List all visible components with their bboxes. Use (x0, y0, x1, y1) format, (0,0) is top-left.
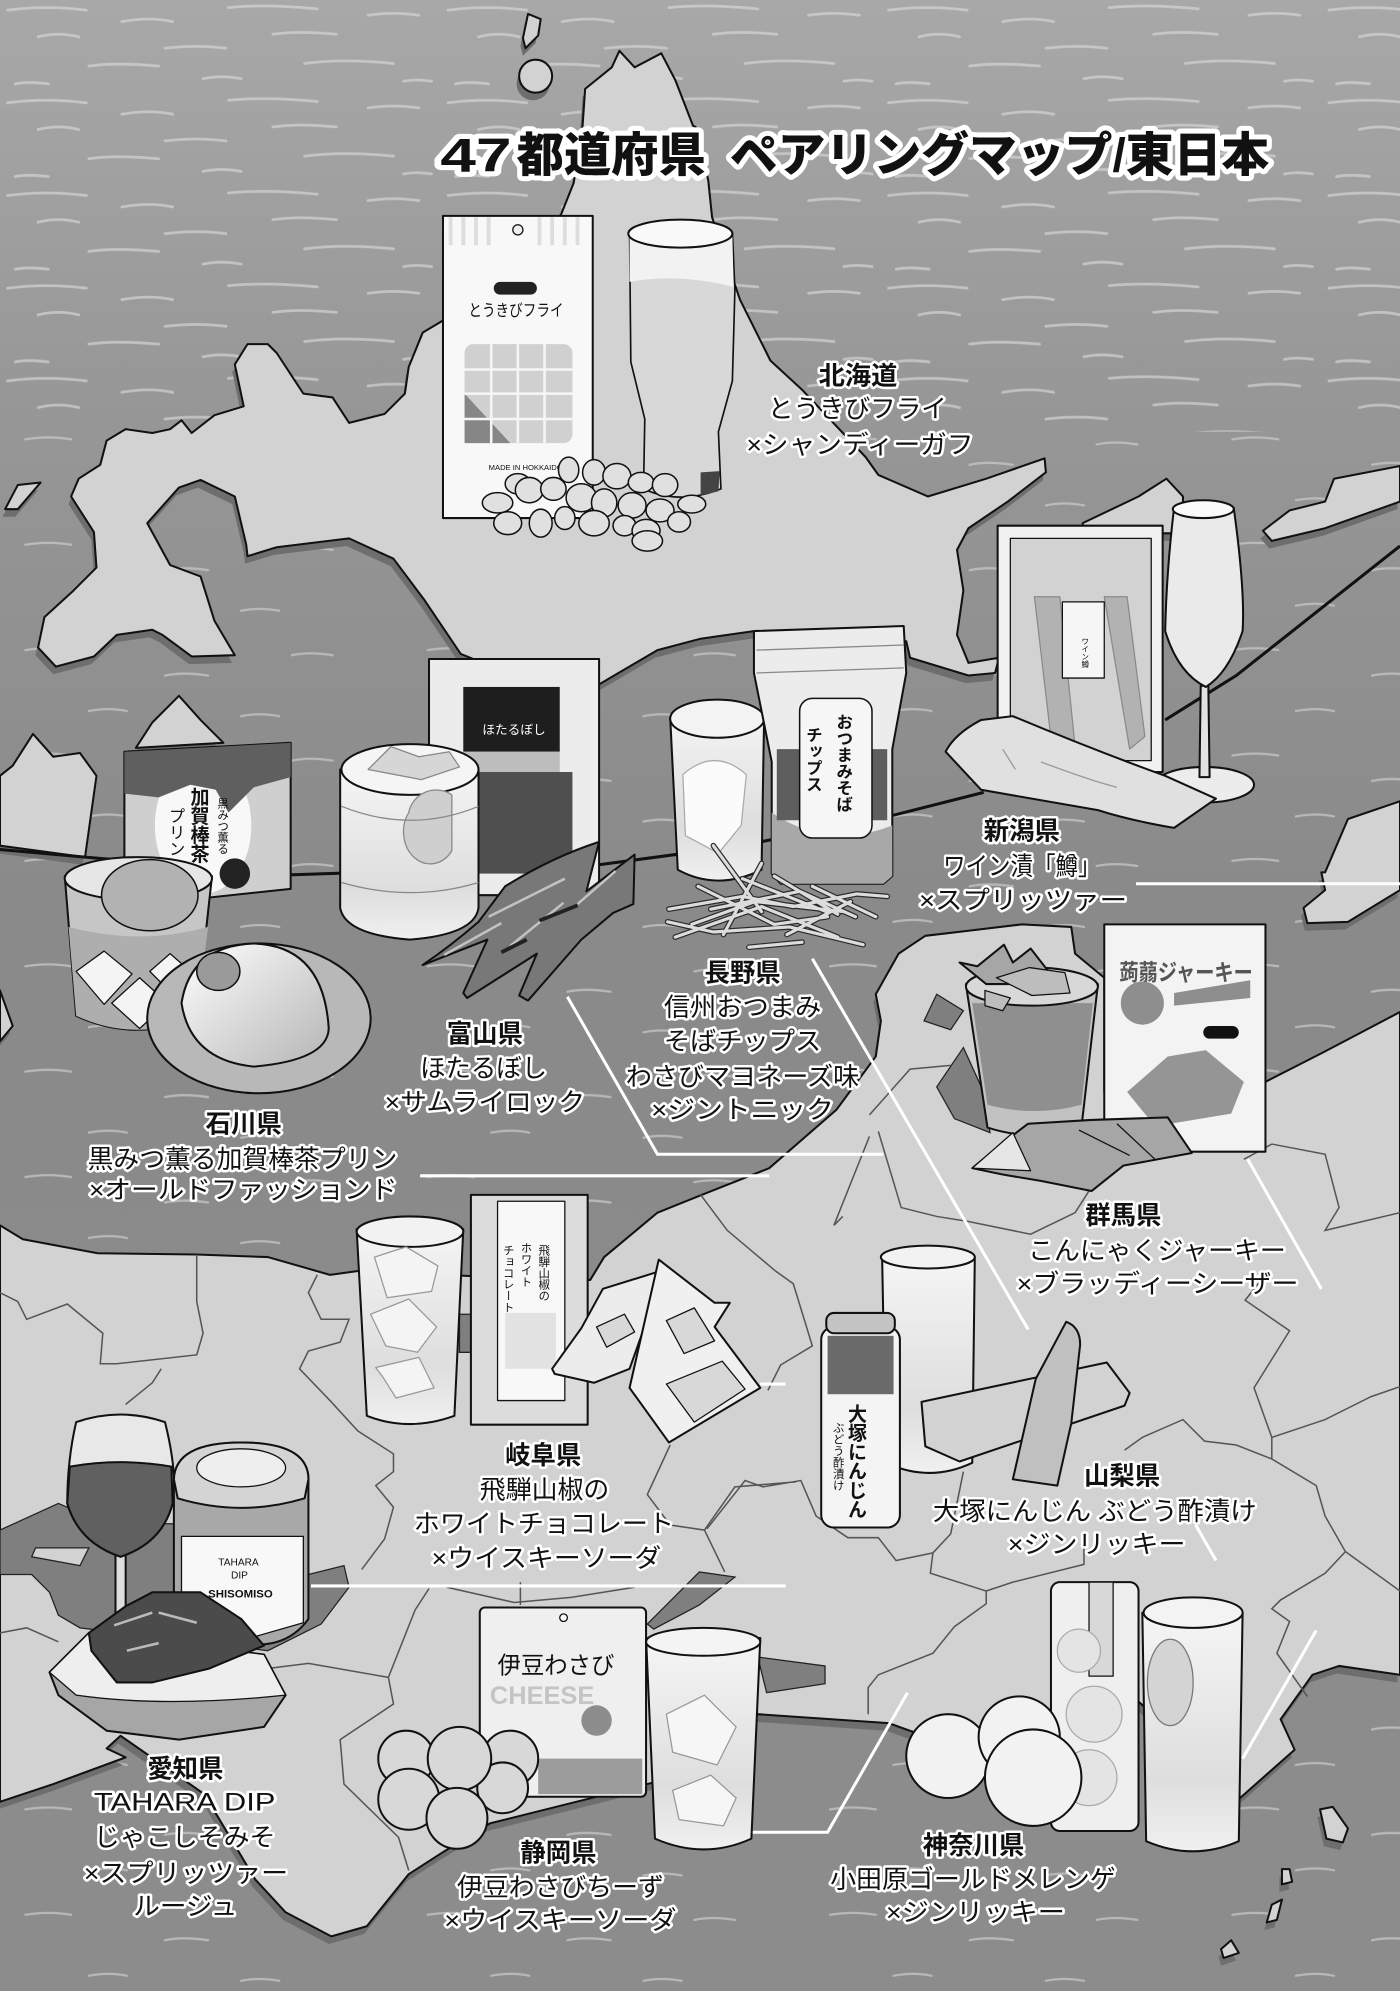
firefly squid package (429, 659, 599, 895)
label: Ishikawa: ×オールドファッションド (89, 1177, 397, 1205)
soba chips bag (754, 626, 906, 884)
label: Toyama: ほたるぼし (420, 1055, 547, 1083)
label: Gunma: こんにゃくジャーキー (1028, 1238, 1286, 1266)
title: ペアリングマップ/東日本 (730, 128, 1269, 181)
label: Aichi: TAHARA DIP (94, 1789, 275, 1817)
label: Yamanashi: ×ジンリッキー (1008, 1531, 1185, 1559)
illustration: Shizuoka wasabi cheese and whisky soda (378, 1608, 760, 1849)
label: Gunma: 群馬県 (1085, 1202, 1161, 1230)
fried soba noodles (668, 846, 887, 947)
illustration: Aichi dip toast and sparkling rouge (50, 1415, 308, 1740)
konjac jerky pieces (972, 1117, 1192, 1191)
callout line: Kanagawa (1243, 1630, 1316, 1759)
illustration: Niigata wine pickled trout and spritzer (946, 500, 1254, 828)
label: Ishikawa: 石川県 (206, 1111, 282, 1139)
label: Niigata: 新潟県 (984, 817, 1060, 845)
callout line: Niigata (1136, 883, 1400, 885)
wasabi cheese package: CHEESE (490, 1682, 594, 1710)
konjac jerky package: 蒟蒻ジャーキー (1119, 959, 1253, 985)
illustration: Nagano soba chips and gin tonic: おつまみそば (834, 713, 853, 813)
pickle jar (821, 1313, 900, 1528)
illustration: Kanagawa gold meringue and gin rickey (906, 1582, 1243, 1851)
callout line: Shizuoka (751, 1693, 908, 1832)
white chocolate pieces (552, 1272, 661, 1383)
label: Hokkaido: ×シャンディーガフ (746, 431, 974, 459)
dense sea waves (0, 0, 1400, 432)
label: Ishikawa (88, 1111, 397, 1205)
label: Aichi: 愛知県 (147, 1756, 223, 1784)
cheese balls (378, 1727, 538, 1849)
rock glass with lime (340, 769, 479, 940)
gin rickey glass (1142, 1613, 1243, 1851)
konjac jerky package (1104, 924, 1265, 1152)
label: Yamanashi: 山梨県 (1084, 1462, 1160, 1490)
label: Aichi (84, 1756, 288, 1921)
inset boundary curve (0, 546, 1400, 875)
label: Niigata: ワイン漬「鱒」 (943, 853, 1100, 881)
pickle jar: 大塚にんじん (845, 1404, 867, 1519)
trout fillet (946, 716, 1216, 828)
label: Hokkaido (746, 363, 974, 459)
title (440, 128, 1269, 181)
corn snack package: とうきびフライ (468, 301, 564, 320)
pudding package (124, 743, 291, 907)
beer glass (630, 221, 735, 497)
callout line: Gunma (1248, 1159, 1321, 1289)
label: Nagano: そばチップス (664, 1028, 821, 1056)
label: Yamanashi: 大塚にんじん ぶどう酢漬け (933, 1498, 1257, 1526)
corn snack package: MADE IN HOKKAIDO (489, 463, 563, 472)
old fashioned glass (65, 876, 212, 1030)
label: Hokkaido: とうきびフライ (768, 396, 947, 424)
pickle jar: ぶどう酢漬け (832, 1422, 844, 1491)
label: Nagano: 長野県 (704, 960, 781, 988)
label: Nagano (626, 960, 859, 1125)
bays (0, 994, 990, 1693)
label: Toyama (385, 1020, 585, 1117)
dried firefly squid (423, 842, 635, 1001)
trout package (998, 526, 1163, 772)
wasabi cheese package: 伊豆わさび (498, 1653, 614, 1680)
white chocolate box: ホワイト (519, 1242, 531, 1288)
Tahara dip jar: DIP (231, 1570, 248, 1581)
bloody caesar glass (966, 984, 1098, 1135)
champagne flute (1155, 767, 1254, 802)
whisky soda glass (646, 1638, 760, 1849)
title: 47 (440, 128, 512, 181)
gin rickey glass (882, 1257, 975, 1473)
bread with topping (50, 1633, 286, 1740)
gin tonic glass (670, 705, 764, 881)
callout line: Toyama (567, 997, 883, 1154)
label: Kanagawa (830, 1832, 1116, 1927)
label: Kanagawa: 小田原ゴールドメレンゲ (830, 1866, 1116, 1894)
label: Aichi: ×スプリッツァー (84, 1860, 288, 1888)
callout line: Yamanashi (1196, 1525, 1216, 1561)
Tahara dip jar: SHISOMISO (208, 1588, 273, 1600)
label: Aichi: じゃこしそみそ (94, 1824, 275, 1852)
label: Kanagawa: 神奈川県 (923, 1832, 1024, 1860)
sparse sea waves (0, 432, 1400, 1991)
illustration: Hokkaido corn snack and shandygaff (443, 216, 735, 551)
pudding package: 加賀棒茶 (188, 787, 209, 863)
meringue jar (1051, 1582, 1139, 1831)
label: Gifu: ホワイトチョコレート (414, 1511, 674, 1539)
illustration: Toyama firefly squid and samurai rock (340, 659, 635, 1001)
label: Ishikawa: 黒みつ薫る加賀棒茶プリン (88, 1146, 397, 1174)
label: Gifu (414, 1442, 674, 1573)
illustration: Ishikawa pudding and old fashioned (65, 743, 371, 1093)
meringues (906, 1696, 1081, 1826)
label: Shizuoka: 伊豆わさびちーず (457, 1874, 664, 1902)
white chocolate box (471, 1195, 588, 1425)
callout line: Aichi (311, 1585, 786, 1587)
label: Toyama: 富山県 (447, 1020, 523, 1048)
callout line: Nagano (812, 959, 1028, 1329)
white chocolate box: チョコレート (502, 1244, 514, 1313)
label: Niigata (919, 817, 1127, 915)
label: Shizuoka: ×ウイスキーソーダ (444, 1907, 677, 1935)
corn snack package (443, 216, 593, 518)
whisky soda glass (357, 1229, 463, 1424)
label: Nagano: ×ジントニック (651, 1097, 834, 1125)
label: Hokkaido: 北海道 (819, 363, 897, 391)
firefly squid package: ほたるぼし (482, 723, 546, 737)
Tahara dip jar (174, 1442, 308, 1645)
callout line: Gifu (760, 1383, 786, 1385)
title: 都道府県 (517, 128, 706, 181)
label: Aichi: ルージュ (133, 1893, 237, 1921)
label: Yamanashi (933, 1462, 1257, 1559)
callout line: Ishikawa (420, 1175, 769, 1177)
Tahara dip jar: TAHARA (218, 1558, 259, 1569)
fried corn pile (482, 457, 706, 551)
trout package: ワイン鱒 (1081, 637, 1090, 669)
label: Gunma: ×ブラッディーシーザー (1017, 1271, 1298, 1299)
label: Shizuoka: 静岡県 (520, 1839, 597, 1867)
illustration: Yamanashi carrot pickles and gin rickey (821, 1246, 1130, 1528)
label: Nagano: 信州おつまみ (664, 994, 821, 1022)
pudding package: プリン (166, 808, 184, 857)
label: Nagano: わさびマヨネーズ味 (626, 1064, 859, 1092)
small island in bay (32, 1548, 89, 1566)
white chocolate box: 飛騨山椒の (537, 1244, 550, 1301)
illustration: Gifu white chocolate and whisky soda (357, 1195, 760, 1442)
prefecture borders (0, 1065, 1400, 1870)
illustration: Nagano soba chips and gin tonic (668, 626, 906, 947)
label: Gunma (1017, 1202, 1298, 1299)
label: Niigata: ×スプリッツァー (919, 887, 1127, 915)
label: Gifu: ×ウイスキーソーダ (432, 1545, 661, 1573)
label: Kanagawa: ×ジンリッキー (886, 1899, 1065, 1927)
label: Shizuoka (444, 1839, 677, 1935)
carrots (921, 1362, 1130, 1462)
pudding plate (147, 943, 371, 1093)
label: Gifu: 岐阜県 (505, 1442, 581, 1470)
illustration: Nagano soba chips and gin tonic: チップス (803, 726, 822, 792)
illustration: Gunma konjac jerky and bloody caesar (960, 924, 1265, 1191)
pudding package: 黒みつ薫る (216, 797, 229, 855)
red wine glass (116, 1555, 126, 1619)
label: Toyama: ×サムライロック (385, 1089, 585, 1117)
label: Gifu: 飛騨山椒の (480, 1476, 609, 1504)
wasabi cheese package (480, 1608, 646, 1797)
